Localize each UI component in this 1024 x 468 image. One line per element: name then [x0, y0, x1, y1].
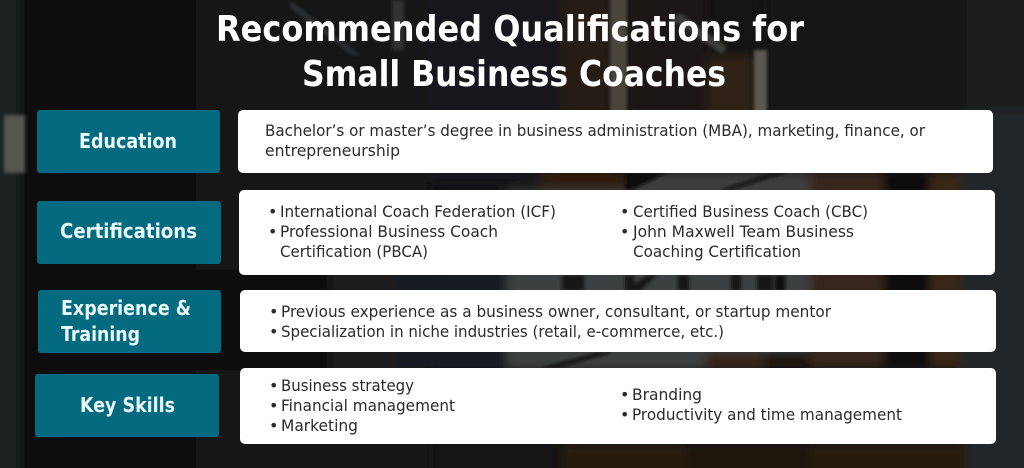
key skills details: • — [269, 376, 278, 395]
key skills details: Productivity and time management — [632, 405, 902, 424]
key skills details — [240, 368, 996, 444]
certifications label: Certifications — [60, 219, 197, 243]
key skills details: • — [269, 396, 278, 415]
certifications details: Certification (PBCA) — [280, 242, 428, 261]
title: Recommended Qualifications for — [216, 9, 804, 50]
experience details: Specialization in niche industries (retail, e-commerce, etc.) — [281, 322, 724, 341]
row: experience and training — [38, 290, 996, 353]
certifications details: • — [620, 222, 629, 241]
key skills details: Branding — [632, 385, 702, 404]
certifications details: International Coach Federation (ICF) — [280, 202, 556, 221]
certifications label — [37, 201, 221, 264]
education details — [238, 110, 993, 173]
certifications details: Certified Business Coach (CBC) — [633, 202, 868, 221]
certifications details: • — [620, 202, 629, 221]
experience details: • — [269, 302, 278, 321]
certifications details — [239, 190, 995, 275]
certifications details: Coaching Certification — [633, 242, 801, 261]
title: Small Business Coaches — [302, 54, 726, 95]
certifications details: • — [268, 222, 277, 241]
key skills details: • — [620, 385, 629, 404]
certifications details: • — [268, 202, 277, 221]
certifications details: John Maxwell Team Business — [632, 222, 854, 241]
row: key skills — [35, 368, 996, 444]
experience details: • — [269, 322, 278, 341]
certifications details: Professional Business Coach — [280, 222, 498, 241]
key skills label: Key Skills — [80, 393, 175, 417]
row: education — [37, 110, 993, 173]
experience label: Training — [61, 322, 140, 346]
education details: Bachelor’s or master’s degree in business administration (MBA), marketing, finance, or — [265, 121, 925, 140]
key skills details: Business strategy — [281, 376, 414, 395]
education label — [37, 110, 220, 173]
key skills details: Financial management — [281, 396, 455, 415]
row: certifications — [37, 190, 995, 275]
education details: entrepreneurship — [265, 141, 400, 160]
experience label: Experience & — [61, 296, 191, 320]
experience details: Previous experience as a business owner, consultant, or startup mentor — [281, 302, 831, 321]
education label: Education — [79, 129, 177, 153]
title — [216, 9, 804, 95]
key skills details: • — [269, 416, 278, 435]
experience details — [240, 290, 996, 352]
key skills details: • — [620, 405, 629, 424]
experience label — [38, 290, 221, 353]
key skills label — [35, 374, 219, 437]
key skills details: Marketing — [281, 416, 358, 435]
